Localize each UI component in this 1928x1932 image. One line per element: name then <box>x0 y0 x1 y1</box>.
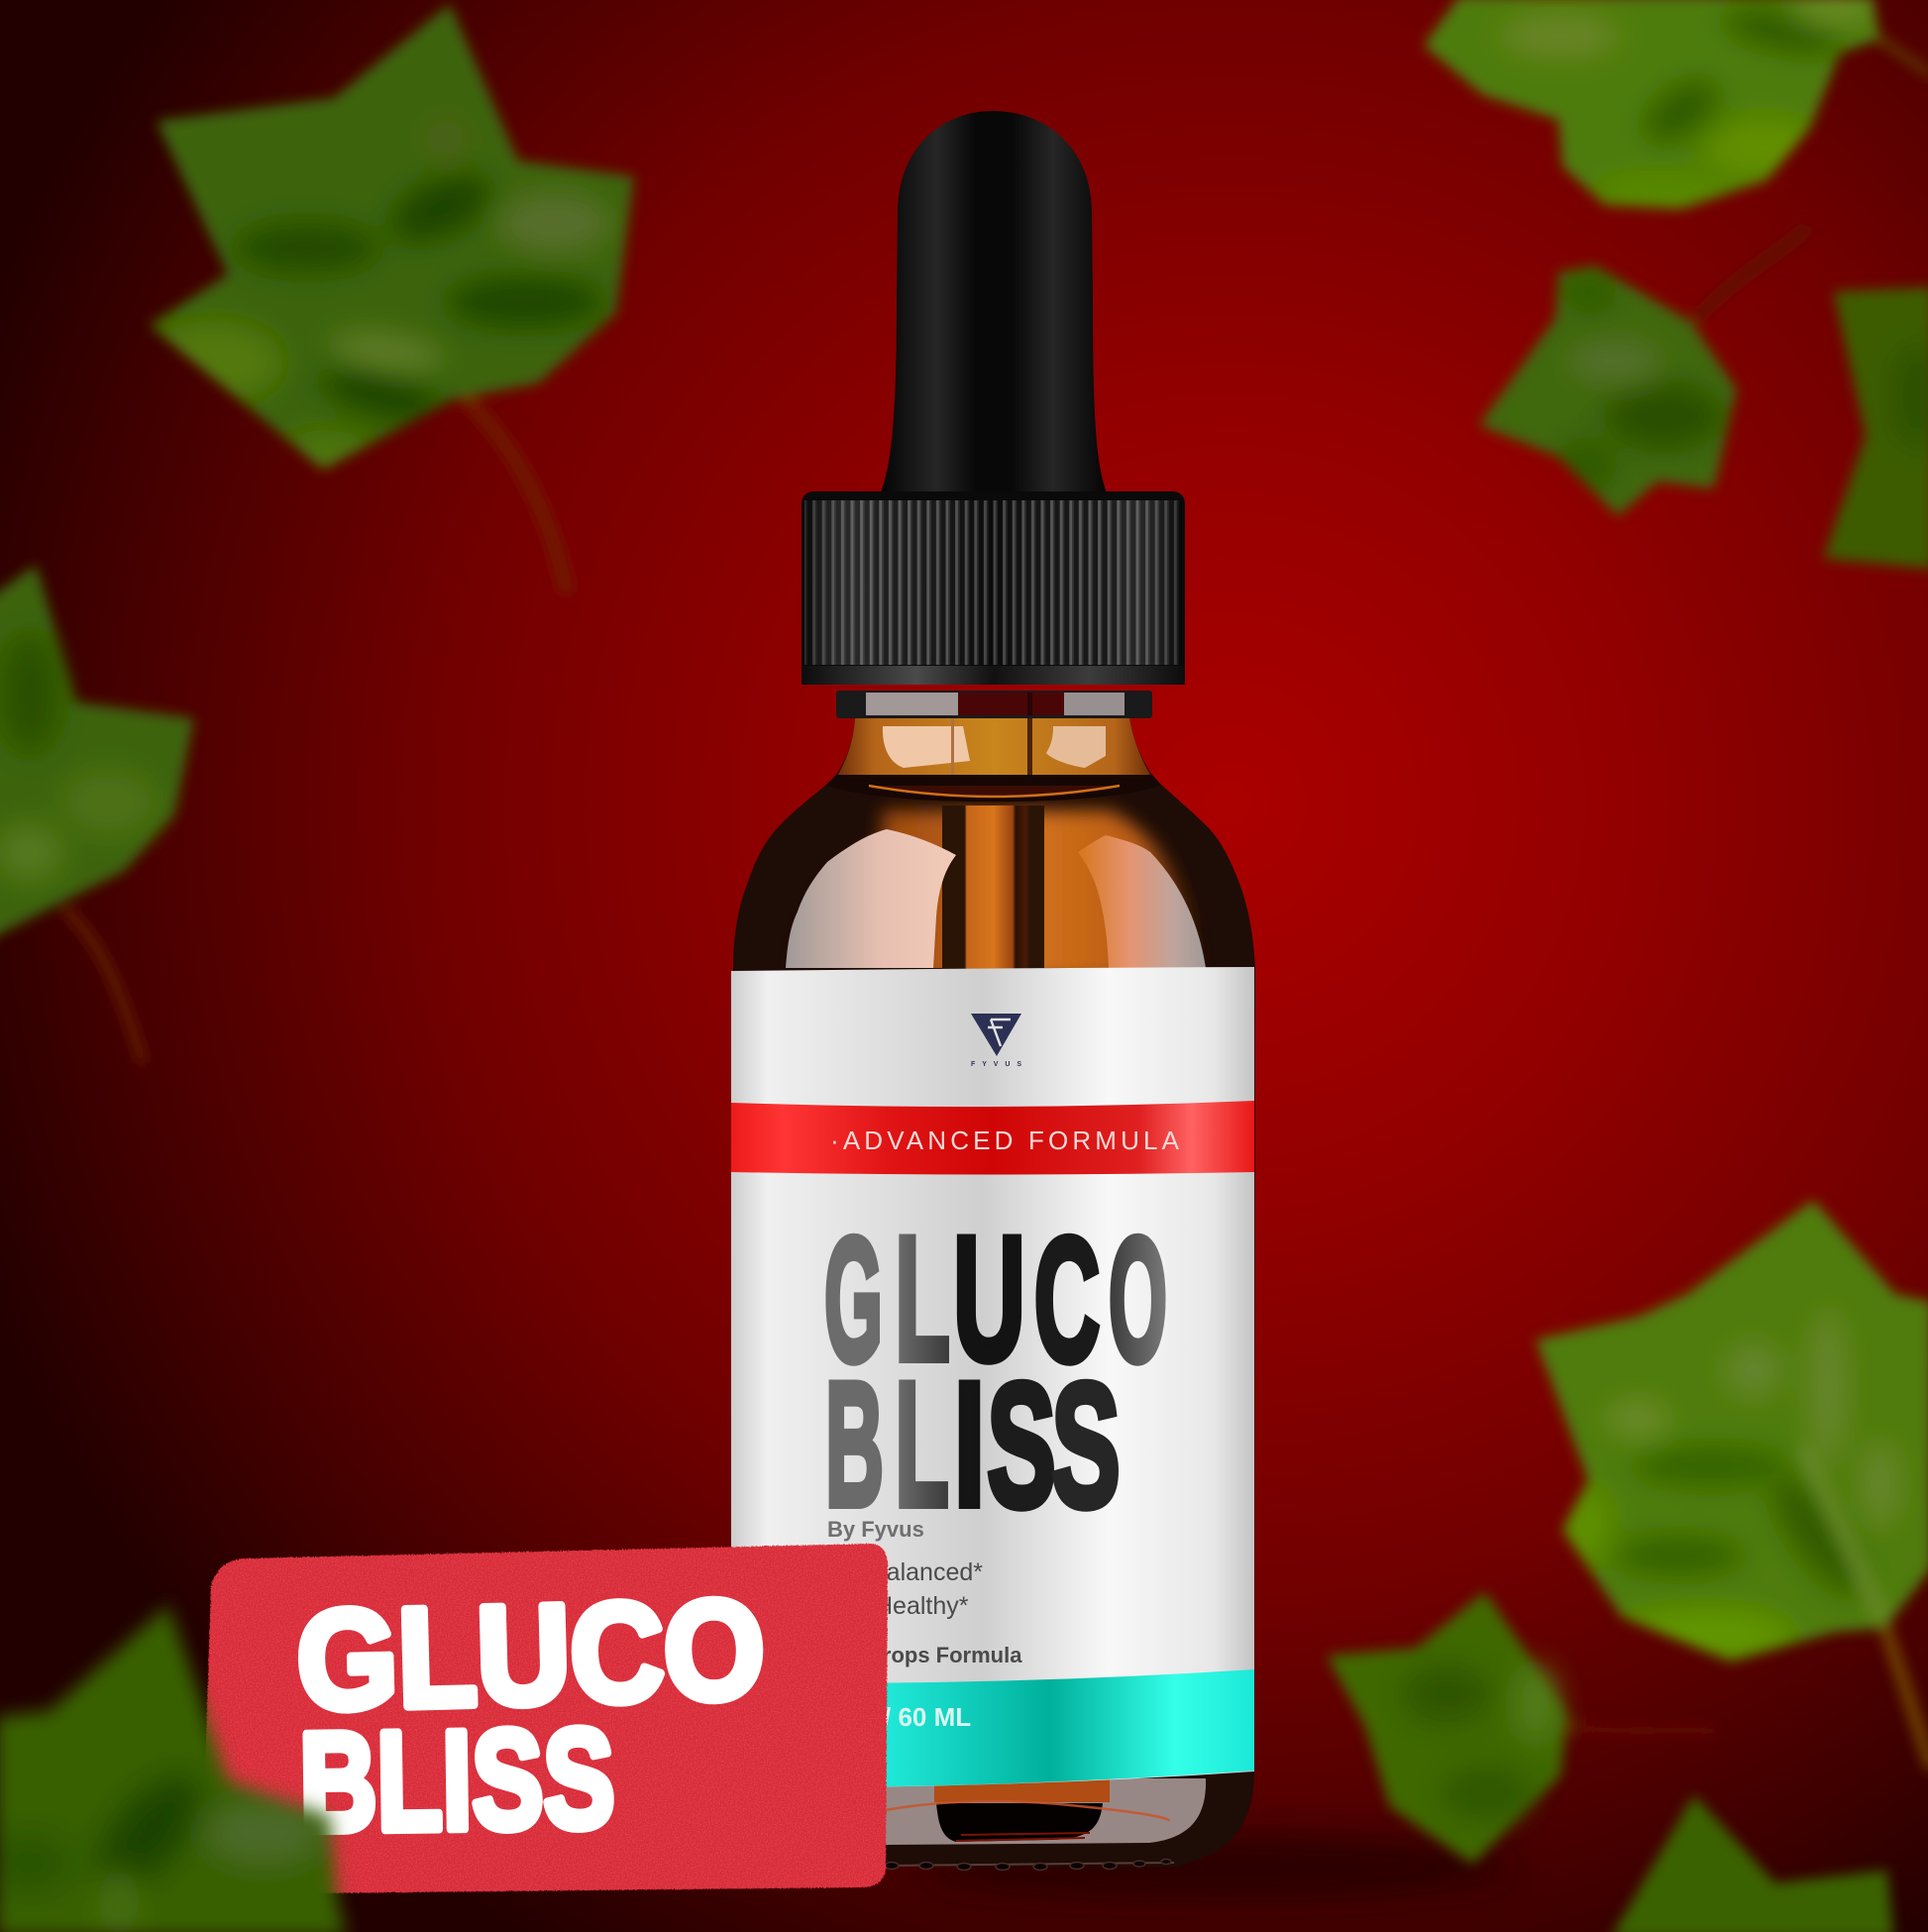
right glass highlight <box>1078 835 1206 968</box>
meniscus <box>826 775 1161 802</box>
glass body <box>731 717 1255 1867</box>
product name <box>824 1200 1167 1544</box>
card background <box>201 1544 888 1894</box>
rubber bulb <box>880 111 1108 495</box>
benefit lines: Balanced* <box>870 1558 983 1586</box>
ribbed cap <box>802 491 1185 685</box>
teal band <box>731 1669 1254 1787</box>
leaf: bottom left foreground <box>0 1600 353 1932</box>
white label <box>731 967 1254 1787</box>
red band <box>731 1101 1254 1175</box>
teal band: / 60 ML <box>884 1702 971 1732</box>
card title: GLUCO <box>295 1570 767 1740</box>
amber liquid <box>862 797 1201 968</box>
product name: S <box>987 1346 1056 1544</box>
card title <box>295 1570 767 1862</box>
leaf: bottom right <box>1614 1798 1891 1932</box>
product name: L <box>895 1200 950 1397</box>
leaf: far right <box>1826 289 1928 567</box>
card title: BLISS <box>298 1700 615 1862</box>
product name: G <box>824 1201 883 1398</box>
benefit lines: Drops Formula <box>867 1643 1022 1667</box>
product name: B <box>825 1347 884 1544</box>
product name: S <box>1051 1346 1121 1544</box>
leaf: right lower large <box>1531 1194 1928 1769</box>
fyvus logo <box>971 1014 1021 1068</box>
red product name card <box>201 1544 888 1894</box>
dropper bottle <box>731 111 1255 1871</box>
leaf: lower middle right <box>1331 1595 1714 1861</box>
product name: U <box>953 1200 1025 1397</box>
collar <box>836 691 1152 718</box>
product name: I <box>954 1345 985 1543</box>
leaf: right middle <box>1476 230 1806 520</box>
benefit lines <box>867 1558 1022 1667</box>
fyvus logo: FYVUS <box>971 1061 1021 1068</box>
leaf: top right <box>1417 0 1928 214</box>
leaf: left edge <box>0 569 191 1059</box>
product name: O <box>1109 1201 1167 1398</box>
floor shadow under bottle <box>921 1834 1516 1901</box>
bottle base <box>885 1778 1206 1871</box>
product name: C <box>1034 1202 1100 1399</box>
advanced formula text: ·ADVANCED FORMULA <box>830 1126 1180 1155</box>
dropper tube <box>942 805 1044 969</box>
amber neck <box>836 717 1152 779</box>
benefit lines: Healthy* <box>875 1592 969 1620</box>
by fyvus: By Fyvus <box>827 1517 924 1542</box>
product name: L <box>895 1345 949 1543</box>
left glass highlight <box>786 829 956 968</box>
leaf: top left <box>139 0 644 588</box>
